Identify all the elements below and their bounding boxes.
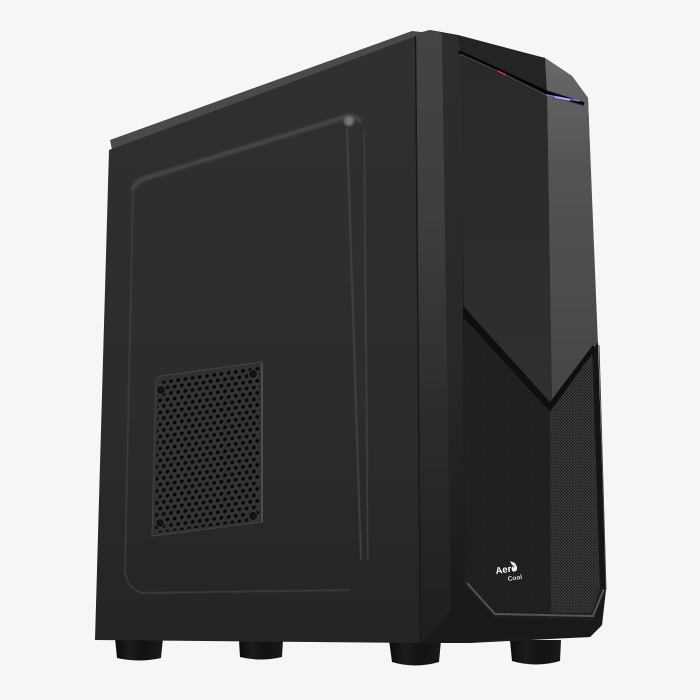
mesh bottom trim (467, 583, 604, 616)
diagonal dark band (463, 306, 596, 412)
top cap (458, 36, 548, 92)
foot 4 (510, 640, 561, 664)
top surface rim (110, 31, 430, 150)
right wing panel (545, 58, 598, 410)
AeroCool logo: Aero (495, 563, 518, 577)
AeroCool logo: Cool (507, 574, 523, 583)
AeroCool logo (495, 561, 523, 583)
front mesh left (464, 318, 551, 613)
main door panel (461, 55, 552, 410)
foot 1 (115, 638, 163, 660)
foot 3 (389, 640, 441, 666)
front body (415, 30, 606, 643)
RGB light strip (459, 52, 584, 106)
foot 2 (239, 640, 283, 660)
front mesh right (550, 354, 600, 613)
embossed side panel area (125, 116, 368, 593)
lower front chamfer (421, 610, 490, 643)
side panel (95, 36, 421, 643)
front left column (415, 30, 451, 643)
ventilation grille (152, 362, 262, 536)
right edge strip (593, 342, 606, 590)
